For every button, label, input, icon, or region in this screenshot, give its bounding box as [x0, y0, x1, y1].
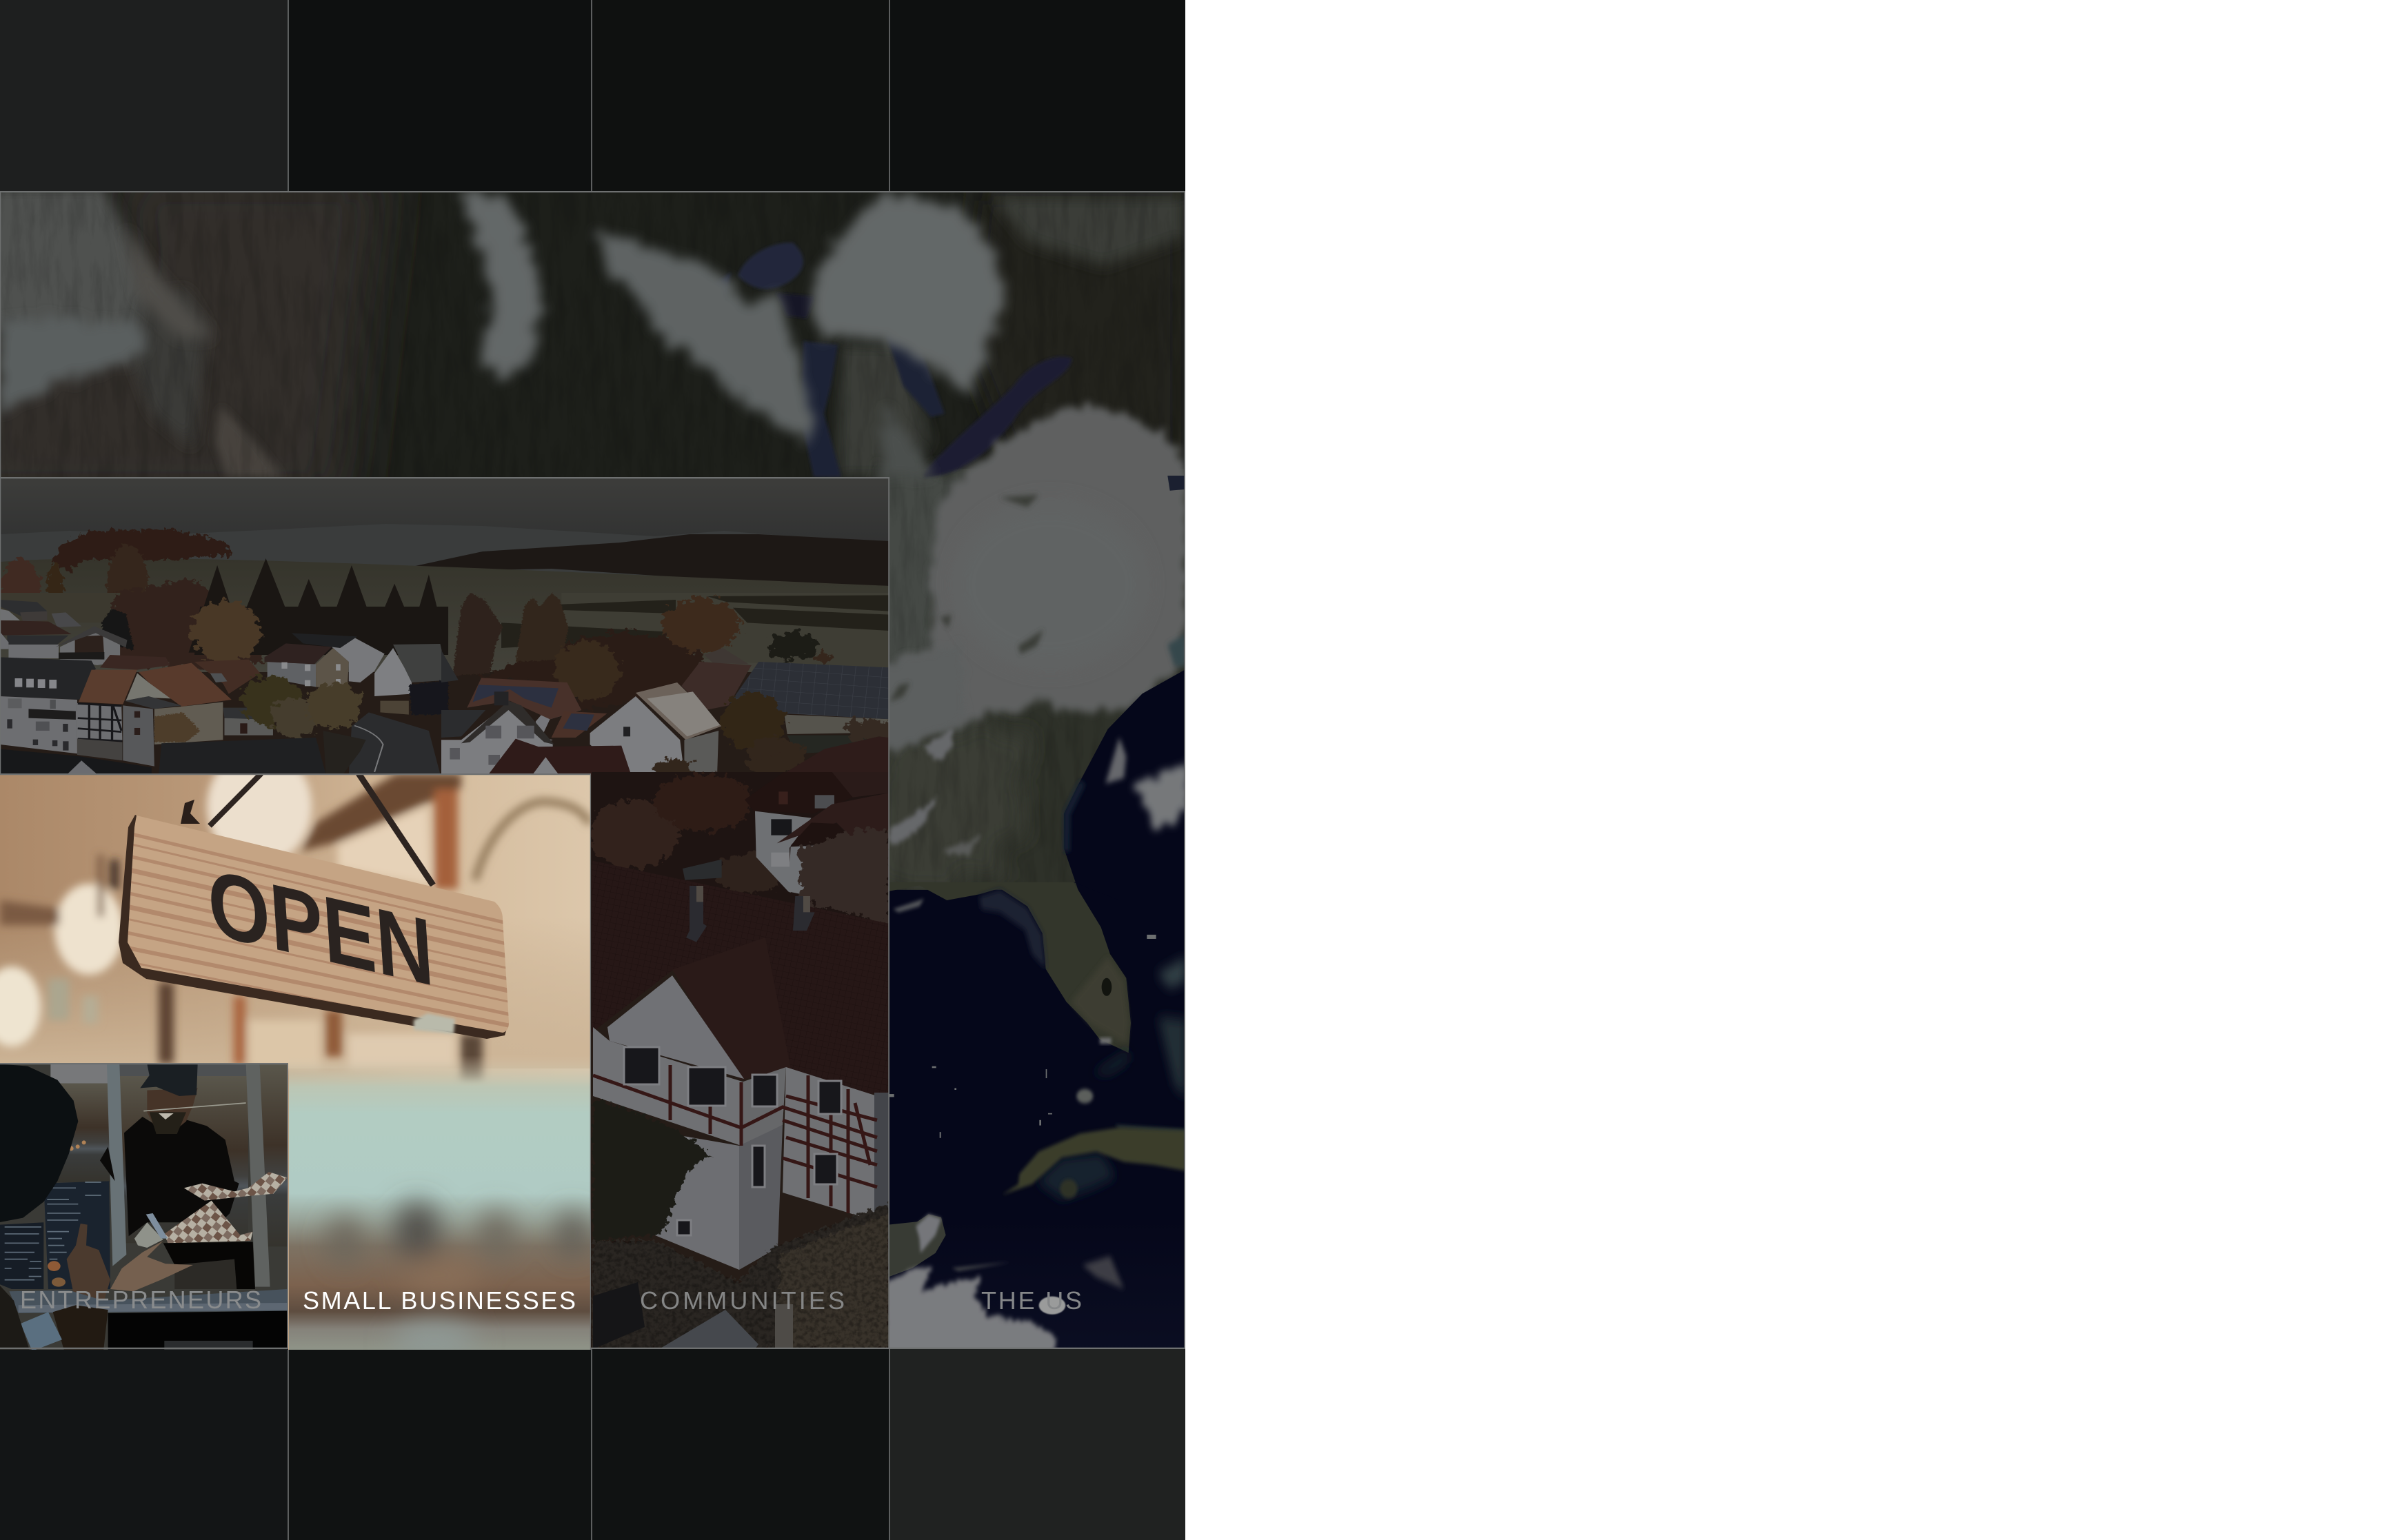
far dark roof — [441, 650, 459, 682]
customer head — [0, 1064, 78, 1222]
atlantic cloud — [1133, 759, 1188, 830]
bottom gable — [533, 757, 559, 774]
land: southern states — [889, 469, 1185, 903]
truck sign — [164, 1341, 253, 1350]
small gable — [67, 760, 97, 774]
island specks — [889, 935, 1156, 1138]
lamp far left — [0, 966, 41, 1046]
road — [349, 712, 440, 774]
wood grain — [117, 831, 524, 1041]
large dark roof — [0, 657, 96, 700]
ivy — [593, 1099, 713, 1241]
white left house wall — [0, 696, 77, 753]
infographic canvas — [0, 0, 1185, 1540]
blue flap — [146, 1213, 168, 1239]
right window — [260, 1063, 290, 1246]
top row of dark cells — [0, 0, 1185, 191]
gable wall — [607, 975, 744, 1079]
under roof wood — [791, 822, 855, 846]
panel border — [0, 478, 889, 1348]
lake corner — [1167, 476, 1186, 491]
wallet — [163, 1242, 255, 1289]
menu food photos — [48, 1261, 66, 1287]
copper strut left — [234, 996, 245, 1065]
garage door — [771, 853, 790, 867]
counter rail — [9, 1289, 288, 1313]
label: entrepreneurs: ENTREPRENEURS — [20, 1286, 261, 1314]
timber framing — [593, 1065, 877, 1213]
upper windows — [778, 791, 834, 809]
dark house windows — [771, 819, 792, 835]
village lower section (scaled crop) — [590, 772, 890, 1094]
roof behind — [100, 655, 170, 670]
post right — [246, 1064, 270, 1287]
tree background — [592, 772, 890, 933]
back roof — [194, 660, 260, 694]
atlantic ocean — [1064, 669, 1186, 903]
bahamas bank south — [1158, 1017, 1186, 1097]
terracotta roof left — [79, 670, 137, 705]
arch shadow — [475, 802, 590, 880]
white house window — [623, 727, 630, 736]
solar barn roof — [730, 662, 889, 719]
cloud: great lakes north — [812, 194, 1003, 400]
panel border — [0, 192, 1185, 1348]
warm lower wash — [0, 917, 591, 1068]
blurred lower reflection — [289, 1055, 592, 1350]
grey wall windows — [134, 711, 140, 735]
chimney right — [793, 896, 815, 931]
ground foliage — [593, 1203, 889, 1349]
counter underside — [108, 1311, 290, 1351]
land: rocky ridge — [214, 407, 283, 477]
grey house windows — [281, 662, 341, 686]
folded napkin — [134, 1222, 163, 1248]
beam — [301, 773, 461, 851]
taut wire — [143, 1103, 246, 1111]
menu board right — [43, 1181, 110, 1289]
background blur shapes — [0, 749, 590, 1082]
post left — [107, 1064, 126, 1266]
land texture streaks — [0, 191, 1185, 903]
stone base — [77, 739, 122, 760]
copper post — [434, 789, 458, 889]
right wing downpipe — [874, 1093, 889, 1230]
window light right of beam — [338, 807, 431, 886]
dark house white wall — [755, 811, 812, 893]
light window panes — [248, 1020, 321, 1068]
coastal shallows — [1067, 782, 1083, 852]
cuba — [1002, 1128, 1186, 1195]
white gable house — [374, 648, 412, 696]
menu board left — [0, 1222, 43, 1289]
keys glow — [1092, 1050, 1129, 1074]
label: communities: COMMUNITIES — [640, 1286, 845, 1315]
white house roof — [636, 682, 721, 740]
trees centre right — [241, 676, 361, 738]
low grey roof — [124, 696, 181, 709]
poplars — [516, 593, 568, 662]
sky — [0, 477, 889, 553]
gable roof — [393, 644, 448, 682]
main terracotta roof — [139, 663, 232, 707]
small roof — [552, 711, 607, 738]
blue sleeve — [21, 1312, 62, 1351]
garden wall — [323, 731, 366, 774]
teal coastal shallows north — [1167, 634, 1186, 667]
half-timber centre wall — [741, 1067, 786, 1146]
hand — [110, 1241, 193, 1291]
florida and gulf coast land — [888, 882, 1131, 1053]
dormer roof — [672, 938, 791, 1080]
garden path — [683, 860, 722, 880]
wisp patch — [1083, 1256, 1124, 1289]
plaster front — [652, 1131, 739, 1270]
small roof panels — [563, 713, 594, 731]
dark house upper — [745, 772, 853, 813]
bahamas bank north — [1157, 957, 1186, 989]
panel: small businesses open sign image — [0, 749, 592, 1359]
chef cap — [140, 1064, 198, 1096]
panel region: gulf and caribbean (scaled from satellite crop) — [886, 882, 1186, 1359]
wisp — [952, 1262, 1012, 1271]
autumn tree mass — [109, 579, 263, 669]
lake small — [776, 293, 815, 318]
sign backing — [119, 815, 509, 1039]
south florida cloud — [1100, 1038, 1112, 1044]
yucatan cloud — [916, 1214, 941, 1253]
top right roof — [832, 772, 889, 798]
rope right — [359, 773, 433, 885]
rope left — [210, 773, 261, 826]
big storm cloud — [883, 407, 1186, 742]
caribbean big cloud — [886, 1266, 1057, 1359]
beige wall — [154, 702, 223, 744]
land: mid-lakes peninsula — [838, 345, 931, 477]
land: western mottling — [874, 467, 965, 731]
top rail — [119, 1064, 248, 1076]
label: small businesses: SMALL BUSINESSES — [303, 1286, 576, 1315]
chef smile — [159, 1113, 174, 1119]
road edge line — [354, 726, 383, 772]
panel region: eastern seaboard (scaled from satellite crop) — [881, 407, 1188, 903]
small annex — [224, 718, 273, 736]
counter inside — [174, 1259, 255, 1289]
right roofs — [778, 736, 889, 777]
panel border — [0, 774, 591, 1353]
half-timbered wall — [77, 703, 122, 741]
dark post left — [159, 982, 174, 1064]
left tree clump — [52, 529, 234, 572]
storm holes — [889, 495, 1043, 702]
solar roof house wall — [536, 685, 581, 744]
main roof — [592, 860, 889, 1094]
cloud: west — [0, 318, 150, 414]
lawn — [0, 749, 152, 774]
brown roof — [681, 662, 752, 710]
gulf and caribbean ocean — [888, 890, 1186, 1359]
shed — [659, 1310, 758, 1349]
base — [0, 1062, 290, 1351]
outer banks cloud — [1105, 737, 1126, 784]
tree against wall — [154, 712, 200, 742]
left bracket — [0, 900, 59, 925]
checkered paper upper — [184, 1172, 288, 1201]
panel: entrepreneurs food truck image — [0, 1062, 290, 1351]
grey house wall — [268, 662, 316, 687]
left truck window — [50, 1084, 110, 1182]
cloud: vertical band — [461, 192, 540, 376]
storm highlight — [954, 503, 1147, 667]
forested hill — [386, 534, 889, 586]
copper strut right — [325, 1010, 342, 1057]
label: the us: THE US — [981, 1286, 1082, 1315]
side bracket — [110, 860, 119, 889]
lake huron — [886, 334, 945, 417]
dark field strips — [501, 595, 889, 648]
land: snowy north-west — [1, 192, 146, 329]
barn wall — [785, 715, 889, 734]
cloud: west haze — [124, 227, 214, 338]
atlantic water east of florida — [1074, 882, 1186, 900]
barn-side trees — [721, 693, 889, 774]
storm left lobe — [881, 645, 967, 748]
balcony — [28, 709, 76, 720]
right shrubs — [779, 1213, 889, 1349]
white house left roof — [461, 701, 554, 744]
house windows — [450, 726, 534, 765]
panel: the US satellite image — [0, 165, 1188, 1359]
dark bush — [409, 680, 448, 715]
panel: communities village image — [0, 477, 890, 1349]
chef beard — [150, 1112, 186, 1134]
land: north-east speckled — [993, 196, 1183, 265]
top strip — [50, 1063, 108, 1084]
bare tree — [800, 829, 889, 924]
annex roof — [223, 708, 272, 719]
land: southern mottling — [889, 725, 1027, 889]
chimney left cap — [696, 886, 703, 902]
autumn trees — [590, 773, 784, 894]
chef window — [119, 1075, 248, 1243]
shed — [380, 701, 409, 715]
lower white wall — [788, 846, 814, 896]
white house wall — [590, 696, 684, 774]
yucatan land — [888, 1214, 946, 1277]
lake michigan — [800, 341, 841, 477]
roof dormer windows — [15, 678, 57, 689]
snow patches — [889, 727, 981, 857]
skylight — [210, 673, 228, 682]
white house left — [441, 703, 553, 776]
land: ridge — [135, 301, 203, 438]
rear hook — [181, 800, 200, 824]
OPEN lettering: OPEN — [205, 849, 436, 1006]
lower trees — [653, 753, 787, 781]
ground foliage grain — [593, 1203, 889, 1349]
open sign board — [110, 807, 524, 1044]
distant hills — [0, 524, 889, 586]
florida texture lighter — [1071, 957, 1129, 1044]
conifer tree — [453, 593, 503, 676]
windows — [624, 1047, 841, 1235]
half-timber upper wall — [593, 1027, 745, 1146]
bottom house roof — [488, 739, 632, 776]
checkered paper lower — [164, 1201, 253, 1243]
bottom row of dark cells — [0, 1347, 1185, 1540]
side roof — [777, 793, 889, 843]
rail highlight — [19, 1303, 288, 1313]
panel border — [0, 1064, 288, 1348]
bright autumn tree — [192, 601, 260, 663]
cloud: great lakes west — [593, 231, 814, 441]
lake okeechobee — [1102, 978, 1112, 996]
chimney right cap — [803, 896, 810, 912]
white house roof panel — [647, 691, 720, 736]
side dark roof — [441, 710, 485, 738]
gulf wisp cloud — [893, 899, 924, 912]
gulf shallows — [979, 890, 1046, 969]
grey house roof — [265, 643, 332, 664]
back roof dark — [292, 633, 357, 648]
conifer trees — [189, 558, 448, 655]
car — [593, 1282, 645, 1349]
menu lines — [5, 1182, 101, 1280]
customer forearm — [53, 1305, 108, 1351]
village right section (scaled crop) — [441, 593, 889, 781]
dark post right — [461, 1034, 483, 1082]
chef back — [100, 1146, 115, 1181]
customer body — [0, 1284, 30, 1351]
chimney left — [686, 886, 707, 942]
lake strip — [696, 272, 731, 310]
lamp top — [207, 749, 312, 864]
lamp left — [54, 884, 123, 975]
land: brown plains — [1, 192, 385, 477]
annex door — [240, 723, 248, 733]
south cuba shallows — [1036, 1153, 1116, 1199]
left autumn trees — [0, 545, 148, 627]
chef jacket — [124, 1117, 239, 1236]
green ground — [787, 736, 889, 753]
beige gable — [316, 648, 349, 688]
fields — [0, 558, 889, 672]
reflected dark blobs — [328, 1202, 587, 1359]
grey wall — [123, 705, 154, 767]
bus sign — [775, 1304, 793, 1349]
land: eastern forest — [965, 192, 1185, 483]
dark conifer — [101, 609, 134, 650]
chimney block — [494, 691, 508, 705]
plaster side — [739, 1125, 783, 1270]
village left section (scaled crop) — [0, 558, 448, 774]
lower dark roof — [159, 738, 326, 774]
autumn trees — [554, 598, 833, 701]
solar panels — [473, 685, 559, 708]
top-left houses — [0, 600, 81, 658]
small top roof — [704, 648, 749, 664]
field patch — [0, 593, 120, 622]
left house windows — [7, 698, 69, 751]
north cuba shelf — [1115, 1124, 1186, 1135]
half-timber annex — [684, 731, 718, 774]
lake superior — [738, 243, 803, 289]
half-timber right wing — [783, 1067, 877, 1222]
lake erie — [924, 356, 1072, 477]
gable wall — [125, 673, 172, 701]
solar roof house — [467, 678, 581, 719]
cloud puff — [1039, 1297, 1065, 1315]
white house back wall — [332, 638, 385, 682]
interior lights — [69, 1140, 86, 1151]
left wall stripe — [98, 855, 103, 917]
fist — [67, 1224, 110, 1305]
chef face — [147, 1088, 198, 1133]
small cloud cay — [1076, 1089, 1093, 1104]
fields — [561, 593, 889, 669]
cloud: lower great lakes — [883, 407, 931, 477]
chalet — [56, 626, 127, 665]
acrylic tab reflection — [414, 1013, 455, 1034]
isle of youth — [1060, 1179, 1078, 1198]
timber grid — [78, 704, 122, 741]
tree mass — [479, 632, 704, 710]
